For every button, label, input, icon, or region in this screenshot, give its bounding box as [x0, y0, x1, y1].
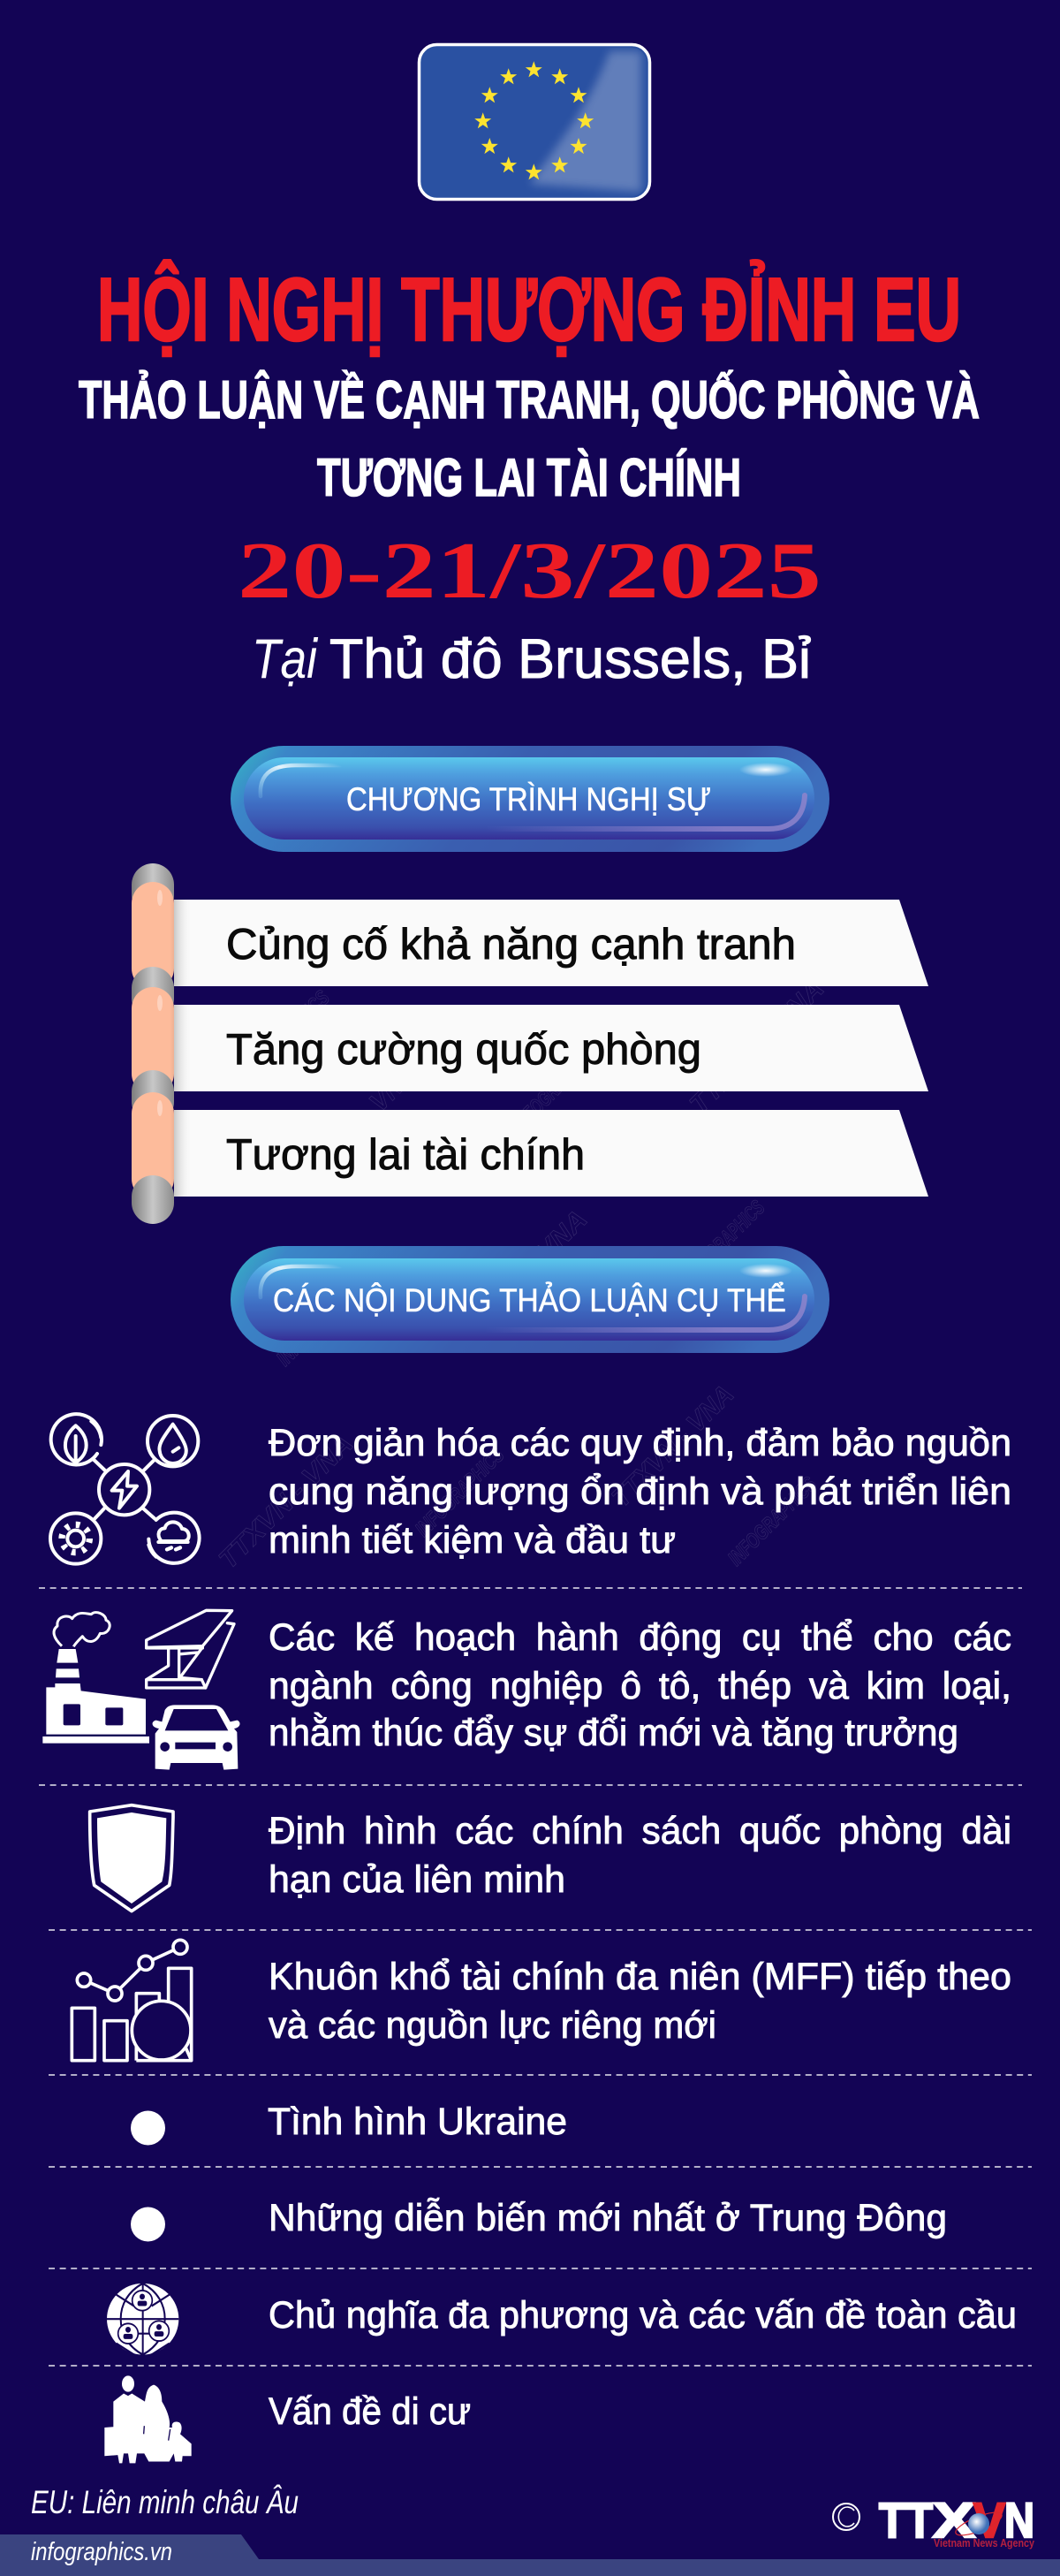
icon: bullet [131, 2110, 165, 2146]
heading: discussion pill [231, 1246, 829, 1353]
text: Middle East: Những diễn biến mới nhất ở Trung Đông [269, 2197, 947, 2239]
text: defence policy: Định hình các chính sách quốc phòng dài [269, 1810, 1011, 1852]
divider [49, 1929, 1032, 1931]
location: Thủ đô Brussels, Bỉ [329, 628, 811, 690]
location: Tại [252, 628, 319, 690]
logo: TTXVN: T [906, 2492, 933, 2548]
divider [49, 2166, 1032, 2168]
logo: TTXVN: Vietnam News Agency [934, 2536, 1035, 2549]
ribbon: finance [174, 1110, 928, 1197]
text: industry: nhằm thúc đẩy sự đổi mới và tăng trưởng [269, 1712, 958, 1754]
ribbon: finance: Tương lai tài chính [226, 1131, 585, 1179]
ribbon: defence: Tăng cường quốc phòng [226, 1026, 701, 1074]
watermarks: INFOGRAPHICS [509, 1043, 601, 1135]
watermarks: TTXVN - VNA [607, 1379, 739, 1513]
logo: TTXVN: X [933, 2492, 975, 2548]
heading: agenda pill [231, 746, 829, 852]
ribbon: defence [174, 1005, 928, 1091]
icon: copyright [833, 2504, 859, 2530]
divider [39, 1587, 1022, 1589]
text: industry: ngành công nghiệp ô tô, thép và kim loại, [269, 1665, 1011, 1707]
logo: TTXVN [879, 2492, 1035, 2549]
watermarks: TTXVN - VNA [448, 1204, 593, 1350]
watermarks: TTXVN - VNA [214, 1429, 359, 1575]
text: energy: cung năng lượng ổn định và phát triển liên [269, 1470, 1011, 1513]
subtitle [79, 370, 980, 507]
icon: globe with people [107, 2283, 178, 2355]
watermarks: INFOGRAPHICS [233, 986, 335, 1087]
icon: EU flag [419, 44, 650, 200]
icon: migrant family [104, 2375, 192, 2463]
panel: agenda ribbons [132, 863, 928, 1224]
icon: scroll rod [132, 863, 174, 1224]
logo: TTXVN: N [1004, 2492, 1034, 2548]
heading: agenda pill: CHƯƠNG TRÌNH NGHỊ SỰ [346, 781, 711, 817]
watermarks [214, 974, 829, 1575]
text: financial framework [269, 1956, 1011, 2047]
watermarks: TTXVN - VNA [290, 1059, 422, 1192]
text: multilateralism: Chủ nghĩa đa phương và các vấn đề toàn cầu [269, 2294, 1017, 2337]
icon: industry [42, 1610, 240, 1770]
text: financial framework: Khuôn khổ tài chính đa niên (MFF) tiếp theo [269, 1956, 1011, 1998]
watermarks: INFOGRAPHICS [723, 1472, 822, 1570]
date: 20-21/3/2025 [238, 526, 822, 615]
subtitle: TƯƠNG LAI TÀI CHÍNH [317, 448, 741, 507]
watermarks: INFOGRAPHICS [272, 1270, 374, 1371]
divider [39, 1784, 1022, 1786]
footer bar [0, 2534, 1060, 2576]
ribbon: competitiveness [174, 900, 928, 986]
text: industry: Các kế hoạch hành động cụ thể cho các [269, 1616, 1011, 1659]
ribbon: competitiveness: Củng cố khả năng cạnh tranh [226, 921, 796, 969]
divider [49, 2074, 1032, 2076]
logo: TTXVN: V [973, 2492, 1005, 2548]
footnote: EU: Liên minh châu Âu [31, 2484, 299, 2520]
text: defence policy [269, 1810, 1011, 1901]
logo: TTXVN: T [879, 2492, 905, 2548]
heading: discussion pill: CÁC NỘI DUNG THẢO LUẬN CỤ THỂ [273, 1281, 786, 1318]
text: energy: minh tiết kiệm và đầu tư [269, 1519, 676, 1562]
source: website: infographics.vn [31, 2538, 172, 2566]
divider [49, 2365, 1032, 2367]
icon: financial chart [72, 1940, 192, 2061]
icon: bullet [131, 2207, 165, 2241]
text: financial framework: và các nguồn lực riêng mới [269, 2004, 716, 2047]
divider [49, 2268, 1032, 2269]
text: Ukraine: Tình hình Ukraine [268, 2101, 567, 2143]
text: energy: Đơn giản hóa các quy định, đảm bảo nguồn [269, 1422, 1011, 1464]
icon: shield [90, 1805, 173, 1911]
watermarks: INFOGRAPHICS [411, 1443, 509, 1541]
icon: energy network [50, 1414, 200, 1564]
text: industry [269, 1616, 1011, 1754]
text: energy [269, 1422, 1011, 1562]
watermarks: INFOGRAPHICS [678, 1196, 769, 1288]
text: migration: Vấn đề di cư [269, 2390, 471, 2433]
text: defence policy: hạn của liên minh [269, 1858, 565, 1901]
watermarks: TTXVN - VNA [685, 974, 829, 1120]
